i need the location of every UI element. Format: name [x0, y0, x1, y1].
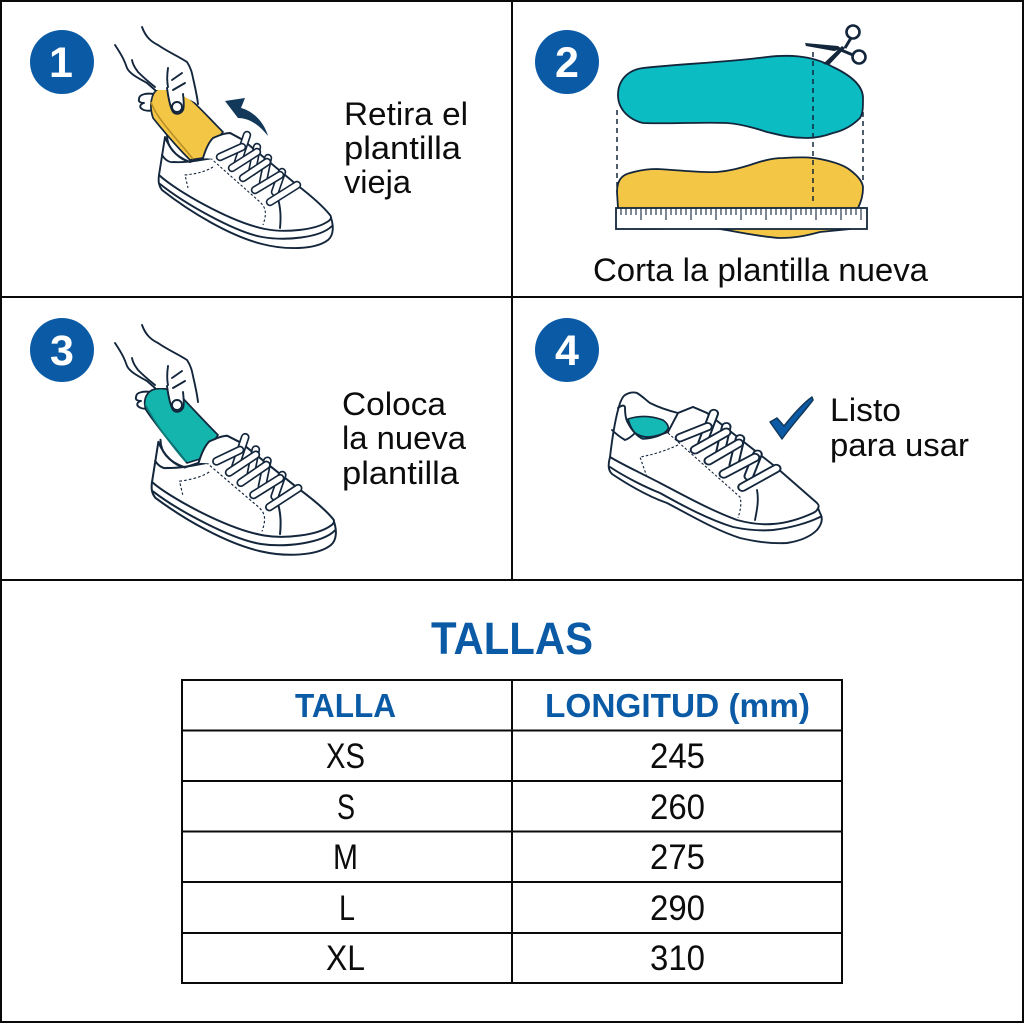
step 1 text — [344, 96, 468, 200]
row XL: XL — [326, 939, 365, 978]
icon: scissors — [805, 26, 866, 65]
illustration: yellow insole — [617, 157, 863, 238]
row XS: 245 — [650, 737, 705, 776]
illustration: teal insole — [618, 56, 863, 138]
row XS — [326, 737, 705, 776]
icon: check mark — [770, 397, 813, 439]
row M — [333, 838, 705, 877]
step 1 text: plantilla — [344, 130, 461, 166]
step 3 text: Coloca — [342, 386, 446, 422]
ruler — [616, 208, 867, 229]
number badge 1: 1 — [49, 39, 73, 87]
step 1 text: vieja — [344, 164, 411, 200]
number badge 4: 4 — [555, 327, 579, 375]
step 3 text: la nueva — [342, 420, 466, 456]
row S: 260 — [650, 788, 705, 827]
illustration: finished shoe — [609, 392, 822, 543]
row L — [339, 889, 705, 928]
table grid — [182, 680, 842, 983]
panel: step 4 — [535, 318, 969, 543]
row M: 275 — [650, 838, 705, 877]
step 3 text: plantilla — [342, 455, 459, 491]
step 3 text — [342, 386, 466, 491]
step 1 text: Retira el — [344, 96, 468, 132]
arrow: pull up — [225, 98, 268, 136]
number badge 2 — [535, 30, 599, 94]
heading: TALLAS: TALLAS — [431, 613, 593, 664]
row XL: 310 — [650, 939, 705, 978]
row S: S — [337, 788, 355, 827]
row S — [337, 788, 705, 827]
step 4 text: para usar — [830, 427, 969, 463]
table header — [295, 687, 810, 724]
table header: LONGITUD (mm) — [545, 687, 810, 724]
step 4 text — [830, 392, 969, 463]
panel: step 3 — [30, 318, 466, 559]
number badge 3: 3 — [50, 327, 74, 375]
panel: size table section — [182, 613, 842, 983]
number badge 4 — [535, 318, 599, 382]
row L: L — [339, 889, 355, 928]
row XL — [326, 939, 705, 978]
step 2 text: Corta la plantilla nueva — [593, 252, 928, 288]
row XS: XS — [326, 737, 365, 776]
panel: step 2 — [535, 26, 928, 288]
illustration: removing old yellow insole from shoe — [115, 27, 333, 248]
row M: M — [333, 838, 358, 877]
number badge 2: 2 — [555, 39, 579, 87]
table header: TALLA — [295, 687, 396, 724]
panel: step 1 — [30, 27, 468, 248]
illustration: inserting teal insole into shoe — [115, 325, 336, 559]
step 4 text: Listo — [830, 392, 901, 428]
number badge 3 — [30, 318, 94, 382]
cut guide dashed lines — [617, 52, 863, 202]
number badge 1 — [30, 30, 94, 94]
row L: 290 — [650, 889, 705, 928]
